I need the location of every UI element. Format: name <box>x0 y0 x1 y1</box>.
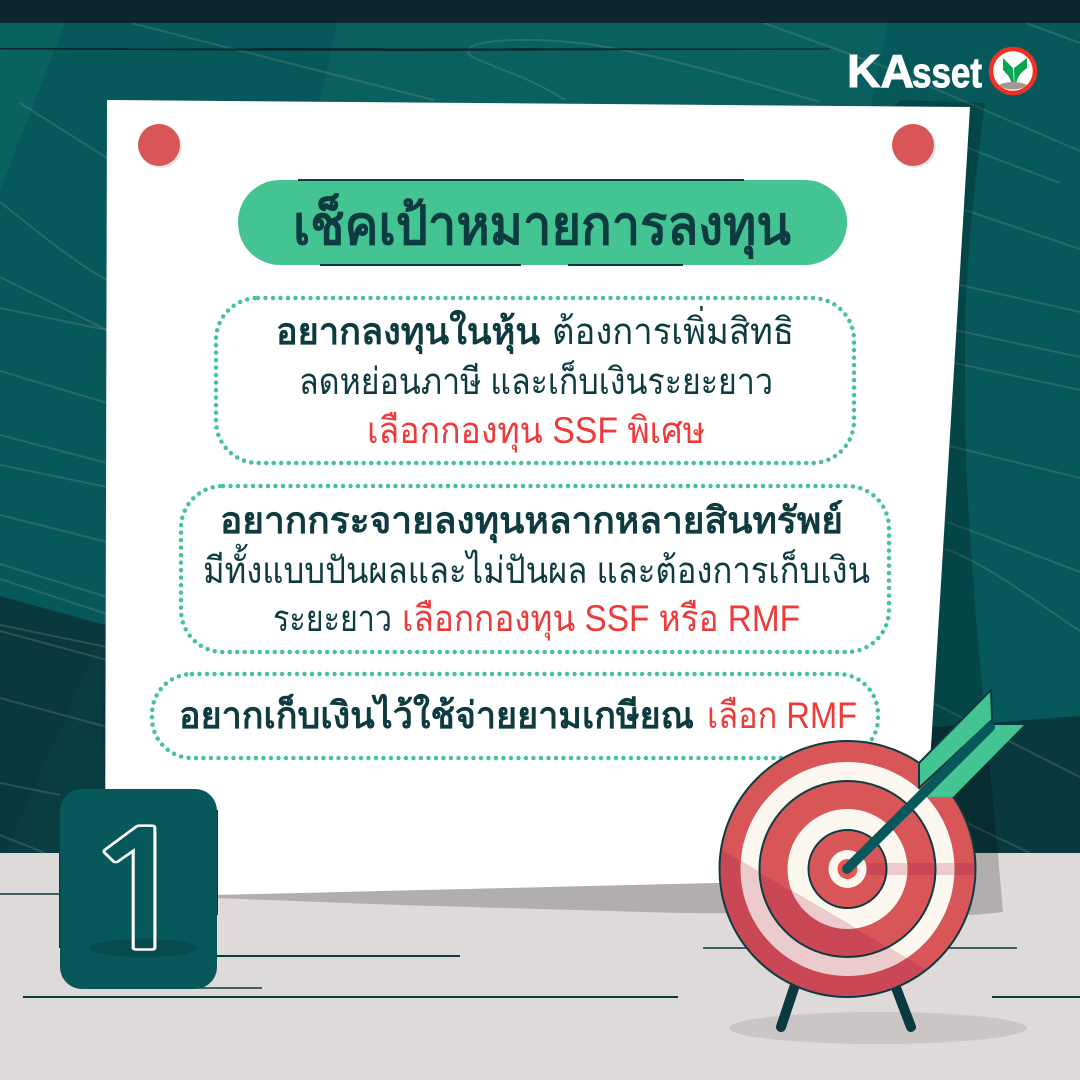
target ground shadow <box>729 1012 1027 1044</box>
diversify goal text: ระยะยาว <box>273 598 392 639</box>
stocks goal text <box>276 305 794 453</box>
logo wordmark: KA <box>847 45 914 97</box>
target legs <box>781 985 911 1027</box>
panel: stocks goal <box>216 298 854 463</box>
retirement goal text: เลือก RMF <box>707 695 857 736</box>
panel: retirement goal <box>152 674 878 758</box>
retirement goal text: อยากเก็บเงินไว้ใช้จ่ายยามเกษียณ <box>179 692 694 736</box>
diversify goal text: อยากกระจายลงทุนหลากหลายสินทรัพย์ <box>220 500 843 544</box>
top bar <box>0 0 1080 23</box>
number block <box>60 789 217 989</box>
background wall <box>0 0 1080 853</box>
diversify goal text <box>203 500 870 641</box>
stocks goal text: ลดหย่อนภาษี และเก็บเงินระยะยาว <box>299 358 773 402</box>
pin right <box>892 124 936 168</box>
stocks goal text: เลือกกองทุน SSF พิเศษ <box>367 410 705 453</box>
logo emblem <box>991 49 1035 93</box>
target board <box>720 741 976 997</box>
stocks goal text: อยากลงทุนในหุ้น <box>276 309 540 355</box>
floor <box>0 853 1080 1080</box>
pin left <box>138 124 182 168</box>
logo wordmark: sset <box>912 49 982 96</box>
diversify goal text: มีทั้งแบบปันผลและไม่ปันผล และต้องการเก็บเงิน <box>203 543 870 591</box>
logo wordmark <box>847 45 982 97</box>
paper shadow <box>216 100 1003 915</box>
title pill <box>238 180 847 265</box>
arrow <box>847 690 1024 869</box>
paper sheet <box>105 100 970 895</box>
title text: เช็คเป้าหมายการลงทุน <box>293 194 791 260</box>
logo: KAsset <box>847 45 1035 97</box>
diversify goal text: เลือกกองทุน SSF หรือ RMF <box>402 598 800 641</box>
stocks goal text: ต้องการเพิ่มสิทธิ <box>552 305 794 352</box>
number 1: 1 <box>78 813 201 974</box>
panel: diversify goal <box>181 486 889 652</box>
